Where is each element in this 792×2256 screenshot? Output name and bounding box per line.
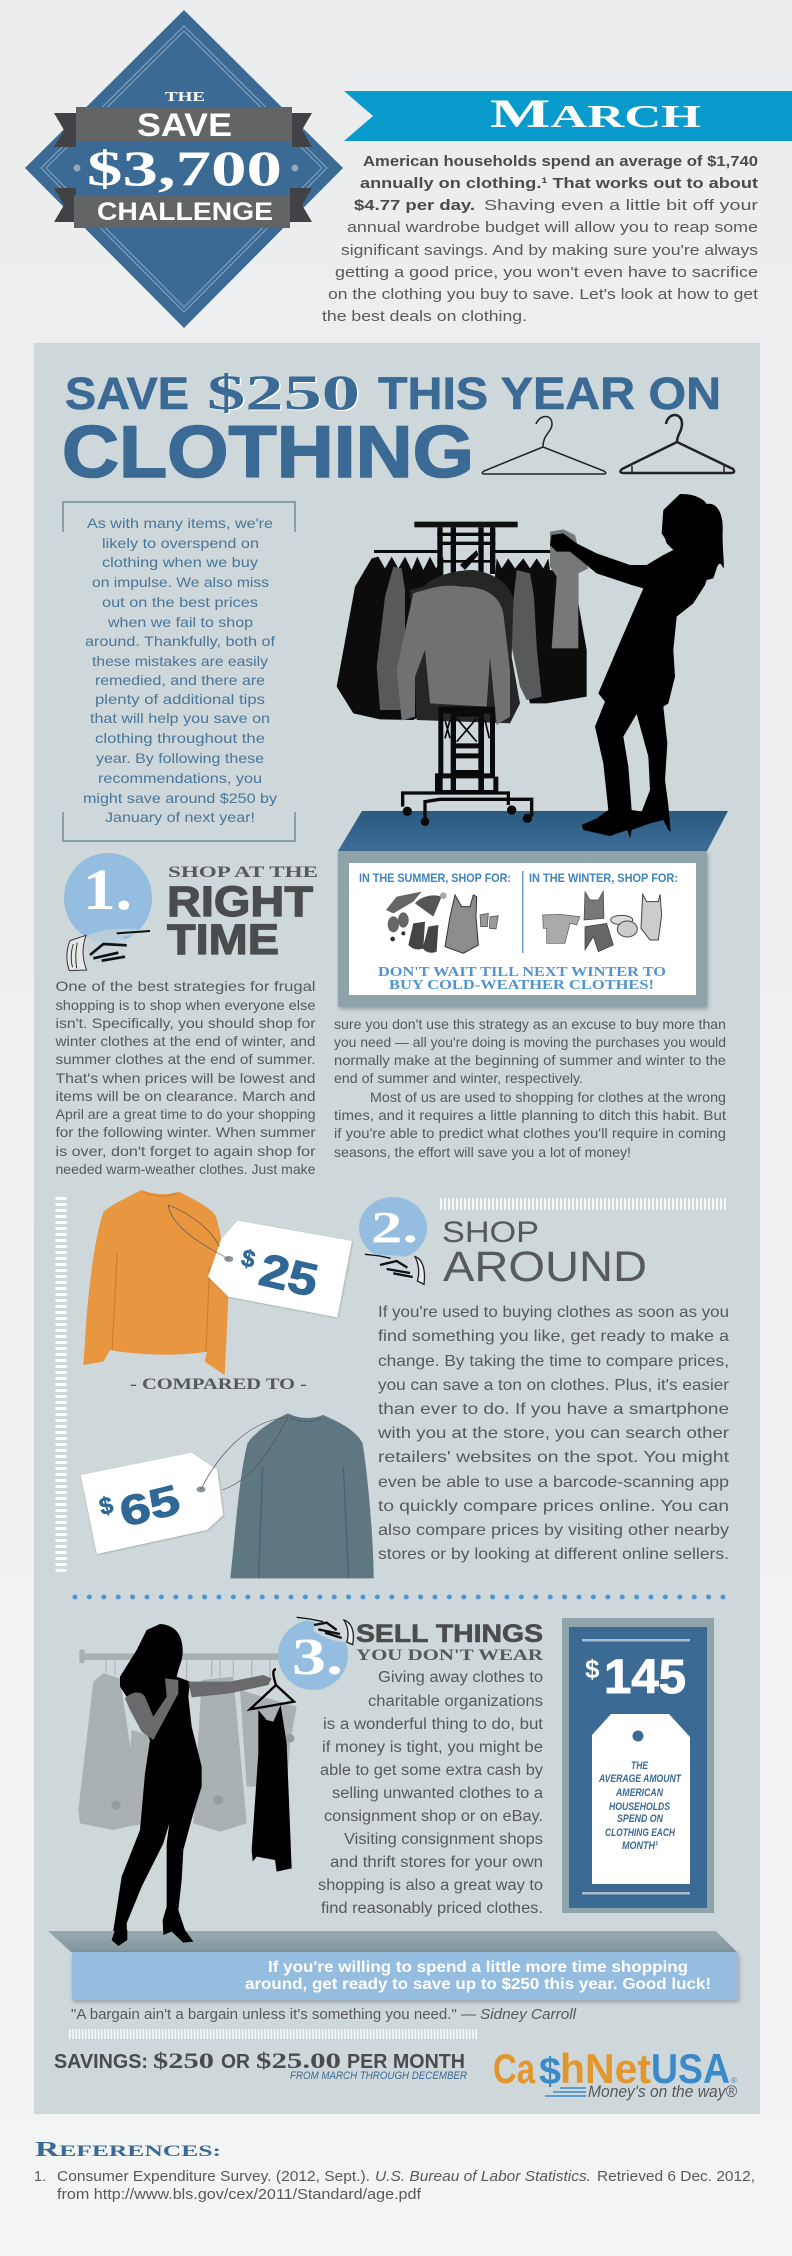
callout frame and intro paragraph: when we fail to shop xyxy=(107,614,253,630)
section 2 body: change. By taking the time to compare prices, xyxy=(378,1353,729,1370)
intro text: Shaving even a little bit off your xyxy=(484,197,758,214)
callout frame and intro paragraph: remedied, and there are xyxy=(95,672,265,688)
section 2 body: stores or by looking at different online sellers. xyxy=(378,1546,729,1563)
section 3 number and heading: YOU DON'T WEAR xyxy=(356,1647,544,1664)
section 3 number and heading: 3. xyxy=(292,1629,343,1686)
icon: pointing hand 1 xyxy=(67,929,150,971)
woman's feet over banner ledge xyxy=(112,1925,193,1946)
callout frame and intro paragraph: clothing throughout the xyxy=(95,730,265,746)
intro text: annually on clothing.¹ That works out to about xyxy=(360,175,758,192)
illustration: slate shirt with $65 tag: $ xyxy=(97,1492,117,1521)
title: Save $250 this year on clothing: $250 xyxy=(208,365,362,421)
section 2 number and heading: SHOP xyxy=(442,1216,539,1249)
closing banner: If you're willing to spend a little more time shopping xyxy=(268,1959,688,1976)
title: Save $250 this year on clothing: THIS YEAR ON xyxy=(378,368,721,419)
section 1 body left column: One of the best strategies for frugal xyxy=(56,978,316,994)
section 1 number and heading: 1. xyxy=(83,857,132,922)
section 2 body: you can save a ton on clothes. Plus, it's easier xyxy=(378,1377,730,1394)
stripe divider xyxy=(69,2029,477,2039)
intro text xyxy=(322,153,759,325)
callout frame and intro paragraph: January of next year! xyxy=(105,809,255,825)
stat box: $145 monthly spend: THE xyxy=(631,1760,649,1772)
savings total: PER MONTH xyxy=(347,2051,465,2073)
savings total: FROM MARCH THROUGH DECEMBER xyxy=(290,2070,467,2082)
references: U.S. Bureau of Labor Statistics. xyxy=(375,2169,591,2185)
callout frame and intro paragraph: around. Thankfully, both of xyxy=(85,633,275,649)
section 2 body: If you're used to buying clothes as soon as you xyxy=(378,1304,729,1321)
references: Retrieved 6 Dec. 2012, xyxy=(597,2169,755,2185)
stat box: $145 monthly spend: $ xyxy=(585,1654,600,1684)
section 1 body right column: Most of us are used to shopping for clothes at the wrong xyxy=(370,1089,726,1105)
logo: CashNetUSA: $ xyxy=(539,2051,561,2093)
logo: CashNetUSA: ® xyxy=(731,2076,737,2085)
section 2 body: with you at the store, you can search other xyxy=(377,1425,730,1442)
badge: The Save $3,700 Challenge: SAVE xyxy=(137,107,232,143)
section 1 body left column: winter clothes at the end of winter, and xyxy=(54,1033,315,1049)
floor platform under shopper xyxy=(338,811,728,851)
section 2 number and heading: AROUND xyxy=(443,1243,647,1291)
badge: The Save $3,700 Challenge: THE xyxy=(165,90,205,105)
intro text: American households spend an average of $1,740 xyxy=(363,153,758,170)
banner: March: M ARCH xyxy=(490,91,701,136)
references: from http://www.bls.gov/cex/2011/Standard/age.pdf xyxy=(57,2187,422,2203)
references: R EFERENCES: xyxy=(35,2137,221,2161)
section 2 body: to quickly compare prices online. You can xyxy=(378,1498,729,1515)
section 3 body: and thrift stores for your own xyxy=(330,1854,543,1871)
illustration: slate shirt with $65 tag: 65 xyxy=(115,1476,184,1536)
callout frame and intro paragraph: As with many items, we're xyxy=(87,515,273,531)
section 2 number and heading xyxy=(359,1197,727,1291)
section 2 number and heading: 2. xyxy=(371,1203,418,1252)
section 3 body: consignment shop or on eBay. xyxy=(324,1808,543,1825)
callout frame and intro paragraph: on impulse. We also miss xyxy=(92,574,269,590)
callout frame and intro paragraph: these mistakes are easily xyxy=(92,653,268,669)
callout frame and intro paragraph: recommendations, you xyxy=(98,770,262,786)
stat box: $145 monthly spend: HOUSEHOLDS xyxy=(609,1801,671,1813)
stat box: $145 monthly spend: SPEND ON xyxy=(617,1813,664,1825)
section 3 number and heading xyxy=(278,1620,544,1690)
intro text: significant savings. And by making sure you're always xyxy=(341,242,758,259)
callout frame and intro paragraph: out on the best prices xyxy=(102,594,258,610)
vertical stripe band xyxy=(56,1197,66,1574)
illustration: orange shirt with $25 tag: $ xyxy=(239,1245,258,1274)
section 1 body left column: shopping is to shop when everyone else xyxy=(56,997,316,1013)
icons: warm-weather clothes xyxy=(543,891,662,952)
stat box: $145 monthly spend: MONTH¹ xyxy=(622,1840,658,1852)
section 1 number and heading: TIME xyxy=(167,916,279,964)
badge: The Save $3,700 Challenge xyxy=(25,10,343,328)
section 3 body: is a wonderful thing to do, but xyxy=(323,1716,544,1733)
illustration: woman shopper silhouette xyxy=(550,494,724,838)
tip box: seasonal shopping: IN THE SUMMER, SHOP FOR: xyxy=(359,871,511,885)
section 1 body right column: seasons, the effort will save you a lot of money! xyxy=(334,1144,631,1160)
tip box: seasonal shopping xyxy=(338,851,707,1007)
section 3 body: selling unwanted clothes to a xyxy=(332,1785,543,1802)
section 1 body right column: you need — all you're doing is moving the purchases you would xyxy=(334,1034,726,1050)
main panel background xyxy=(34,343,760,2114)
intro text: annual wardrobe budget will allow you to reap some xyxy=(347,219,758,236)
section 1 body left column: isn't. Specifically, you should shop for xyxy=(56,1015,316,1031)
illustration: hanging clothes background xyxy=(78,1649,297,1832)
section 1 body right column: sure you don't use this strategy as an excuse to buy more than xyxy=(334,1016,726,1032)
section 2 body xyxy=(377,1304,730,1563)
callout frame and intro paragraph xyxy=(63,502,295,841)
callout frame and intro paragraph: that will help you save on xyxy=(90,710,270,726)
section 3 body: Giving away clothes to xyxy=(378,1669,543,1686)
stat box: $145 monthly spend: AVERAGE AMOUNT xyxy=(598,1773,682,1785)
section 1 body left column: items will be on clearance. March and xyxy=(56,1088,316,1104)
section 3 number and heading: SELL THINGS xyxy=(356,1620,543,1648)
callout frame and intro paragraph: plenty of additional tips xyxy=(95,691,265,707)
callout frame and intro paragraph: might save around $250 by xyxy=(83,790,277,806)
section 3 body: Visiting consignment shops xyxy=(344,1831,543,1848)
banner: March xyxy=(344,91,792,141)
title: Save $250 this year on clothing: CLOTHING xyxy=(62,412,474,493)
callout frame and intro paragraph: year. By following these xyxy=(96,750,264,766)
icons: cold-weather clothes xyxy=(386,892,498,953)
dotted divider xyxy=(75,1594,737,1600)
title: Save $250 this year on clothing xyxy=(62,364,721,493)
savings total xyxy=(54,2048,467,2082)
savings total: $250 xyxy=(153,2048,214,2073)
intro text: on the clothing you buy to save. Let's look at how to get xyxy=(328,286,759,303)
stat box: $145 monthly spend: CLOTHING EACH xyxy=(605,1827,676,1839)
logo: CashNetUSA xyxy=(493,2045,738,2101)
section 1 body right column xyxy=(334,1016,726,1160)
closing banner: around, get ready to save up to $250 this year. Good luck! xyxy=(245,1976,711,1993)
section 1 body right column: times, and it requires a little planning to ditch this habit. But xyxy=(334,1107,726,1123)
savings total: OR xyxy=(221,2051,251,2073)
section 1 body left column xyxy=(54,978,316,1177)
illustration: slate shirt with $65 tag xyxy=(81,1413,374,1578)
intro text: the best deals on clothing. xyxy=(322,308,527,325)
logo: CashNetUSA: hNet xyxy=(560,2045,651,2092)
section 3 body: shopping is also a great way to xyxy=(318,1877,543,1894)
references: 1. xyxy=(34,2169,46,2185)
tip box: seasonal shopping: DON'T WAIT TILL NEXT WINTER TO xyxy=(378,965,666,980)
illustration: orange shirt with $25 tag: 25 xyxy=(255,1243,323,1307)
section 1 body left column: is over, don't forget to again shop for xyxy=(56,1143,316,1159)
logo: CashNetUSA: USA xyxy=(651,2045,730,2092)
section 3 body: able to get some extra cash by xyxy=(320,1762,543,1779)
section 2 body: find something you like, get ready to make a xyxy=(378,1328,729,1345)
quote: Sidney Carroll xyxy=(480,2007,577,2023)
savings total: SAVINGS: xyxy=(54,2051,148,2073)
savings total: $25.00 xyxy=(256,2048,341,2073)
quote: "A bargain ain't a bargain unless it's something you need." — xyxy=(71,2007,477,2023)
section 1 body right column: if you're able to predict what clothes you'll require in coming xyxy=(334,1125,726,1141)
intro text: $4.77 per day. xyxy=(354,197,475,214)
tip box: seasonal shopping: IN THE WINTER, SHOP FOR: xyxy=(529,871,678,885)
section 1 number and heading: SHOP AT THE xyxy=(168,864,318,881)
section 1 body left column: summer clothes at the end of summer. xyxy=(56,1051,316,1067)
section 3 body: charitable organizations xyxy=(368,1693,543,1710)
badge: The Save $3,700 Challenge: CHALLENGE xyxy=(97,198,273,226)
section 1 body left column: needed warm-weather clothes. Just make xyxy=(56,1161,316,1177)
section 2 body: also compare prices by visiting other nearby xyxy=(378,1522,729,1539)
logo: CashNetUSA: Ca xyxy=(493,2045,535,2092)
illustration: woman holding dress xyxy=(112,1624,294,1946)
section 2 body: even be able to use a barcode-scanning app xyxy=(378,1474,729,1491)
section 2 body: than ever to do. If you have a smartphone xyxy=(378,1401,729,1418)
references: Consumer Expenditure Survey. (2012, Sept.). xyxy=(57,2169,370,2185)
icon: thin hanger xyxy=(482,416,606,474)
illustration: orange shirt with $25 tag xyxy=(83,1190,352,1375)
icon: thick hanger xyxy=(620,415,734,473)
stat box: $145 monthly spend: AMERICAN xyxy=(615,1787,664,1799)
section 1 body left column: April are a great time to do your shopping xyxy=(56,1106,316,1122)
section 1 number and heading: RIGHT xyxy=(167,878,313,926)
intro text: getting a good price, you won't even have to sacrifice xyxy=(335,264,758,281)
logo: CashNetUSA: Money's on the way® xyxy=(588,2083,738,2101)
badge: The Save $3,700 Challenge: $3,700 xyxy=(87,140,282,196)
references xyxy=(34,2137,755,2203)
stat box: $145 monthly spend: 145 xyxy=(604,1651,686,1704)
section 1 body left column: for the following winter. When summer xyxy=(56,1124,316,1140)
title: Save $250 this year on clothing: SAVE xyxy=(65,368,189,419)
tip box: seasonal shopping: BUY COLD-WEATHER CLOTHES! xyxy=(389,978,654,993)
title: Save $250 this year on clothing: $250 xyxy=(207,364,360,420)
icon: pointing hand 3 xyxy=(297,1617,353,1645)
section 3 body: find reasonably priced clothes. xyxy=(321,1900,543,1917)
section 3 body: if money is tight, you might be xyxy=(322,1739,543,1756)
illustration: clothing rack xyxy=(337,522,587,826)
stat box: $145 monthly spend xyxy=(562,1618,714,1913)
closing banner xyxy=(48,1931,738,2000)
label: compared to: - COMPARED TO - xyxy=(130,1376,307,1393)
icon: pointing hand 2 xyxy=(365,1254,424,1284)
section 3 body xyxy=(318,1669,544,1917)
section 1 body right column: end of summer and winter, respectively. xyxy=(334,1070,583,1086)
section 1 body left column: That's when prices will be lowest and xyxy=(56,1070,316,1086)
section 1 body right column: normally make at the beginning of summer and winter to the xyxy=(334,1052,726,1068)
section 1 number and heading xyxy=(64,853,318,964)
callout frame and intro paragraph: clothing when we buy xyxy=(102,554,258,570)
callout frame and intro paragraph: likely to overspend on xyxy=(102,535,259,551)
section 2 body: retailers' websites on the spot. You might xyxy=(378,1449,730,1466)
